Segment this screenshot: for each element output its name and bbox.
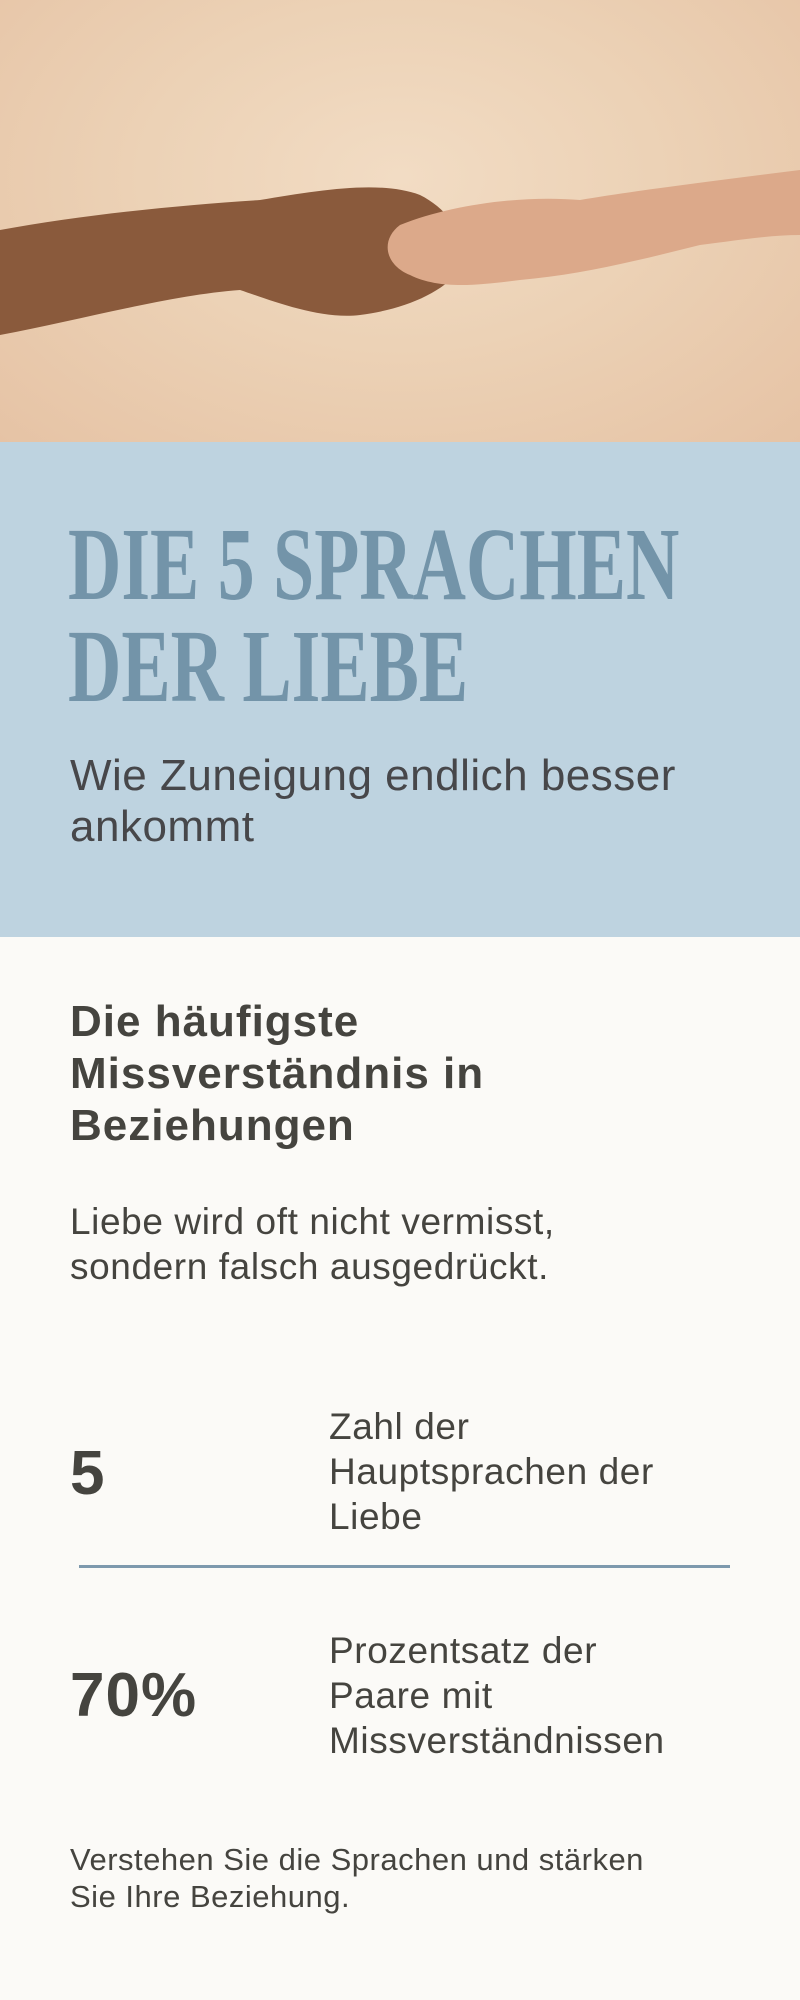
label [329, 1630, 665, 1761]
title: DER LIEBE [68, 609, 468, 724]
heading: Beziehungen [70, 1101, 355, 1150]
text block: intro: Liebe wird oft nicht vermisst, [70, 1201, 555, 1242]
label: Zahl der [329, 1406, 470, 1447]
label: Liebe [329, 1496, 423, 1537]
number: 5 [70, 1439, 104, 1508]
text block: intro [70, 1201, 555, 1287]
icon: left arm (dark skin) [0, 187, 463, 335]
heading: Die häufigste [70, 997, 359, 1046]
stat: 5 [70, 1406, 654, 1537]
subtitle: Wie Zuneigung endlich besser [70, 751, 676, 800]
number: 70% [70, 1661, 197, 1730]
subtitle: ankommt [70, 802, 254, 851]
heading [70, 997, 484, 1150]
footer text [70, 1842, 644, 1914]
title [68, 507, 679, 724]
title: DIE 5 SPRACHEN [68, 507, 679, 622]
footer text: Verstehen Sie die Sprachen und stärken [70, 1842, 644, 1877]
stat: 70% [70, 1630, 665, 1761]
heading: Missverständnis in [70, 1049, 484, 1098]
panel: title block [0, 442, 800, 937]
subtitle [70, 751, 676, 851]
label: Missverständnissen [329, 1720, 665, 1761]
text block: intro: sondern falsch ausgedrückt. [70, 1246, 549, 1287]
footer text: Sie Ihre Beziehung. [70, 1879, 350, 1914]
label [329, 1406, 654, 1537]
label: Paare mit [329, 1675, 493, 1716]
icon: right arm (light skin) [388, 170, 800, 285]
photo: holding hands [0, 0, 800, 442]
label: Prozentsatz der [329, 1630, 597, 1671]
label: Hauptsprachen der [329, 1451, 654, 1492]
